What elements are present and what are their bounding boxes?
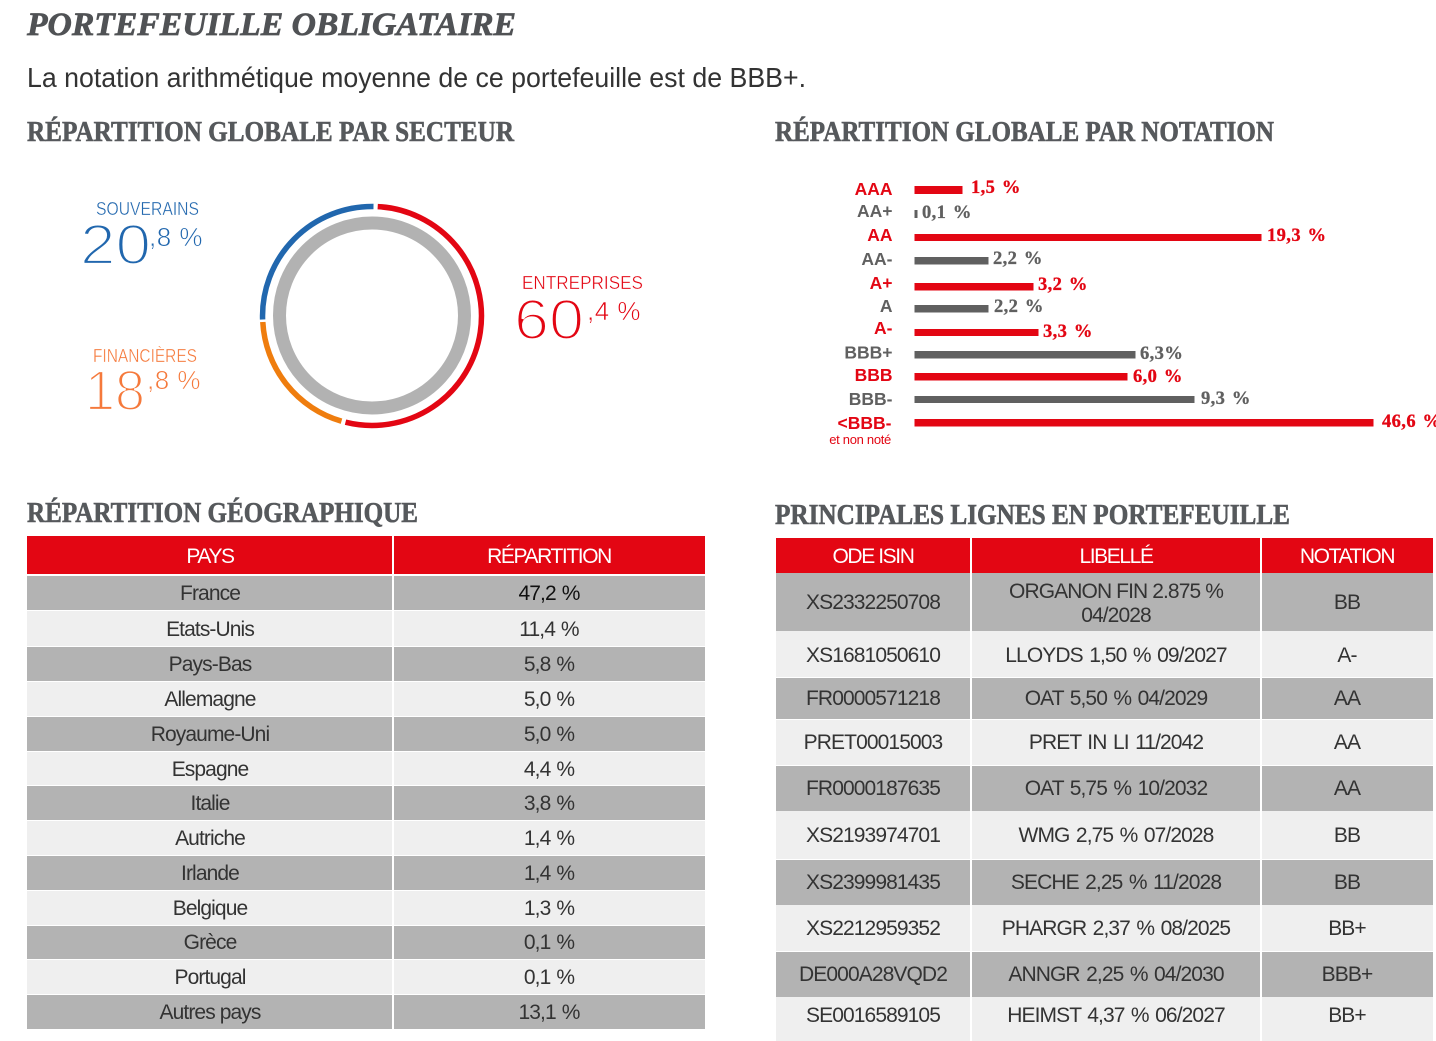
table rows: BB bbox=[1334, 871, 1360, 894]
table rows: Autriche bbox=[175, 827, 245, 850]
bar chart: ratings bbox=[829, 178, 1436, 447]
bar: AA: 19,3 % bbox=[1267, 226, 1326, 246]
table header: LIBELLÉ bbox=[1079, 545, 1154, 568]
table rows: ORGANON FIN 2.875 % bbox=[1009, 580, 1223, 603]
table rows: PRET00015003 bbox=[804, 731, 943, 754]
table rows: SE0016589105 bbox=[806, 1004, 940, 1027]
table rows: DE000A28VQD2 bbox=[799, 963, 947, 986]
bar: BBB bbox=[855, 365, 1183, 387]
label: entreprises: 60 bbox=[514, 288, 584, 352]
table rows: HEIMST 4,37 % 06/2027 bbox=[1007, 1004, 1225, 1027]
bar: A- bbox=[874, 318, 1093, 342]
label: financières: ,8 % bbox=[147, 365, 201, 395]
table rows: BB bbox=[1334, 591, 1360, 614]
table rows: 0,1 % bbox=[524, 966, 574, 989]
table rows: AA bbox=[1334, 687, 1361, 710]
table rows: Etats-Unis bbox=[166, 618, 254, 641]
heading: main holdings: PRINCIPALES LIGNES EN PORTEFEUILLE bbox=[775, 500, 1290, 531]
bar: AAA: AAA bbox=[855, 179, 893, 199]
label: entreprises bbox=[514, 273, 643, 352]
table rows: XS2212959352 bbox=[806, 917, 940, 940]
table rows: A- bbox=[1337, 644, 1358, 667]
bar: A+: 3,2 % bbox=[1038, 275, 1088, 295]
table rows: XS2332250708 bbox=[806, 591, 940, 614]
arc: financières bbox=[263, 322, 342, 421]
table rows: OAT 5,50 % 04/2029 bbox=[1025, 687, 1207, 710]
bar: AA+: 0,1 % bbox=[922, 203, 972, 223]
table header: RÉPARTITION bbox=[487, 545, 611, 568]
table rows: XS2193974701 bbox=[806, 824, 940, 847]
heading: geography: RÉPARTITION GÉOGRAPHIQUE bbox=[27, 498, 418, 529]
table rows: AA bbox=[1334, 777, 1361, 800]
table rows: 1,4 % bbox=[524, 827, 574, 850]
bar: A: 2,2 % bbox=[994, 297, 1044, 317]
label: entreprises: ENTREPRISES bbox=[522, 273, 643, 293]
bar: A+: A+ bbox=[870, 273, 892, 293]
table rows: LLOYDS 1,50 % 09/2027 bbox=[1005, 644, 1227, 667]
subtitle: La notation arithmétique moyenne de ce portefeuille est de BBB+. bbox=[27, 62, 806, 93]
table rows: 47,2 % bbox=[519, 582, 580, 605]
table rows: Allemagne bbox=[164, 688, 256, 711]
table header bbox=[776, 538, 1433, 573]
table rows: PRET IN LI 11/2042 bbox=[1029, 731, 1203, 754]
bar: A+ bbox=[870, 273, 1088, 295]
bar: AA bbox=[867, 225, 1326, 246]
table rows: BB bbox=[1334, 824, 1360, 847]
bar: A: A bbox=[880, 296, 893, 316]
table rows bbox=[27, 576, 705, 1029]
heading: rating: RÉPARTITION GLOBALE PAR NOTATION bbox=[775, 117, 1274, 148]
table rows: Pays-Bas bbox=[169, 653, 252, 676]
bar: A-: A- bbox=[874, 318, 893, 338]
bar: BBB-: BBB- bbox=[849, 389, 893, 409]
label: financières: FINANCIÈRES bbox=[93, 346, 197, 366]
table rows: 5,8 % bbox=[524, 653, 574, 676]
table rows: Espagne bbox=[172, 758, 249, 781]
table rows: 13,1 % bbox=[519, 1001, 580, 1024]
bar: BBB+: BBB+ bbox=[844, 342, 892, 362]
label: entreprises: ,4 % bbox=[587, 296, 641, 326]
table rows: PHARGR 2,37 % 08/2025 bbox=[1002, 917, 1230, 940]
bar: BBB: 6,0 % bbox=[1133, 367, 1183, 387]
table rows: Italie bbox=[191, 792, 230, 815]
label: financières bbox=[85, 346, 201, 423]
table rows: BBB+ bbox=[1322, 963, 1373, 986]
bar: AA+: AA+ bbox=[857, 201, 892, 221]
table rows: Royaume-Uni bbox=[151, 723, 269, 746]
table rows: XS1681050610 bbox=[806, 644, 940, 667]
table rows: OAT 5,75 % 10/2032 bbox=[1025, 777, 1207, 800]
label: souverains: 20 bbox=[80, 213, 151, 277]
bar: AA: AA bbox=[867, 225, 893, 245]
label: financières: 18 bbox=[85, 359, 145, 423]
table rows: FR0000571218 bbox=[806, 687, 940, 710]
bar: AA+ bbox=[857, 201, 972, 223]
bar: AAA: 1,5 % bbox=[971, 178, 1021, 198]
table rows: 04/2028 bbox=[1081, 604, 1151, 627]
table: main holdings bbox=[776, 538, 1433, 1041]
arc: entreprises bbox=[346, 207, 481, 425]
bar: BBB+: 6,3% bbox=[1140, 344, 1183, 364]
bar: below BBB- bbox=[829, 412, 1436, 447]
table rows bbox=[776, 573, 1433, 1041]
label: souverains: ,8 % bbox=[149, 222, 203, 252]
table header: NOTATION bbox=[1300, 545, 1394, 568]
bar: A bbox=[880, 296, 1044, 317]
table rows: WMG 2,75 % 07/2028 bbox=[1019, 824, 1214, 847]
table rows: 1,3 % bbox=[524, 897, 574, 920]
bar: AA- bbox=[861, 249, 1043, 269]
bar: below BBB-: <BBB- bbox=[838, 413, 892, 433]
table rows: BB+ bbox=[1328, 1004, 1366, 1027]
table rows: XS2399981435 bbox=[806, 871, 940, 894]
table rows: Irlande bbox=[181, 862, 239, 885]
table rows: 3,8 % bbox=[524, 792, 574, 815]
bar: A-: 3,3 % bbox=[1043, 322, 1093, 342]
title: PORTEFEUILLE OBLIGATAIRE bbox=[26, 7, 516, 43]
bar: BBB+ bbox=[844, 342, 1183, 364]
bar: BBB-: 9,3 % bbox=[1201, 389, 1251, 409]
table rows: ANNGR 2,25 % 04/2030 bbox=[1008, 963, 1224, 986]
table rows: Belgique bbox=[173, 897, 247, 920]
table rows: SECHE 2,25 % 11/2028 bbox=[1011, 871, 1221, 894]
arc: souverains bbox=[263, 206, 374, 320]
heading: sector: RÉPARTITION GLOBALE PAR SECTEUR bbox=[27, 117, 515, 148]
table rows: 4,4 % bbox=[524, 758, 574, 781]
bar: AAA bbox=[855, 178, 1021, 199]
table rows: Autres pays bbox=[160, 1001, 261, 1024]
donut chart bbox=[263, 206, 481, 425]
table header: PAYS bbox=[186, 545, 235, 568]
table rows: France bbox=[180, 582, 240, 605]
table rows: 5,0 % bbox=[524, 723, 574, 746]
label: souverains bbox=[80, 199, 203, 277]
table rows: FR0000187635 bbox=[806, 777, 940, 800]
bar: BBB: BBB bbox=[855, 365, 892, 385]
table rows: AA bbox=[1334, 731, 1361, 754]
bar: AA-: 2,2 % bbox=[993, 249, 1043, 269]
table header: ODE ISIN bbox=[833, 545, 914, 568]
table rows: Grèce bbox=[184, 931, 237, 954]
bar: BBB- bbox=[849, 389, 1251, 409]
table rows: 0,1 % bbox=[524, 931, 574, 954]
table rows: 5,0 % bbox=[524, 688, 574, 711]
bar: below BBB-: et non noté bbox=[829, 432, 891, 447]
label: souverains: SOUVERAINS bbox=[96, 199, 199, 219]
table header bbox=[27, 536, 705, 574]
table rows: BB+ bbox=[1328, 917, 1366, 940]
table rows: Portugal bbox=[174, 966, 246, 989]
table rows: 11,4 % bbox=[519, 618, 579, 641]
bar: AA-: AA- bbox=[861, 249, 893, 269]
table: geography bbox=[27, 536, 705, 1029]
table rows: 1,4 % bbox=[524, 862, 574, 885]
